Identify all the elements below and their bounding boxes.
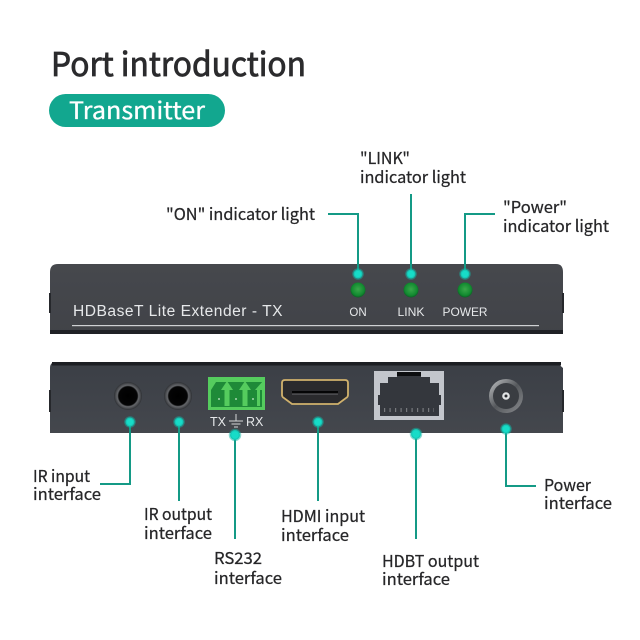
callout: HDBT output interface: HDBT output: [382, 548, 479, 572]
LED: POWER: [458, 282, 472, 298]
IR input jack: [114, 382, 142, 410]
RX label: RX: [246, 415, 264, 429]
title: Port introduction: [51, 38, 306, 86]
callout: Power indicator light: [460, 194, 609, 278]
label: POWER: POWER: [442, 307, 488, 319]
callout: LINK indicator light: "LINK": [360, 145, 410, 169]
callout: HDMI input interface: interface: [281, 522, 349, 546]
LED: LINK: [404, 282, 418, 298]
callout: IR output interface: interface: [144, 520, 212, 544]
callout: Power indicator light: indicator light: [503, 213, 609, 237]
ground symbol: [229, 414, 243, 427]
panel: transmitter front device: [49, 264, 564, 334]
callout: Power interface: Power: [544, 472, 592, 496]
callout: LINK indicator light: [360, 145, 466, 278]
callout: IR output interface: IR output: [144, 501, 212, 525]
callout: Power indicator light: "Power": [503, 194, 567, 218]
callout: ON indicator light: [166, 201, 362, 278]
callout: IR input interface: [33, 418, 134, 505]
callout: RS232 interface: [214, 430, 282, 589]
power jack: [489, 379, 523, 413]
callout: Power interface: [502, 424, 612, 514]
badge: Transmitter: Transmitter: [69, 91, 206, 126]
HDMI port: [282, 380, 348, 404]
callout: HDBT output interface: interface: [382, 566, 450, 590]
IR output jack: [164, 382, 192, 410]
callout: ON indicator light: "ON" indicator light: [166, 201, 315, 225]
RS232 green terminal: [208, 377, 265, 410]
callout: HDMI input interface: [281, 418, 365, 546]
RS232 pin labels: TX: [210, 415, 227, 429]
callout: RS232 interface: RS232: [214, 545, 262, 569]
LED: ON: [350, 282, 366, 298]
callout: Power interface: interface: [544, 490, 612, 514]
callout: IR input interface: IR input: [33, 463, 90, 487]
callout: RS232 interface: interface: [214, 565, 282, 589]
HDBT RJ45 port: [374, 371, 444, 420]
callout: HDBT output interface: [382, 429, 479, 590]
callout: LINK indicator light: indicator light: [360, 164, 466, 188]
callout: IR output interface: [144, 418, 212, 544]
label: LINK: LINK: [398, 307, 425, 319]
device name: HDBaseT Lite Extender - TX: [73, 303, 283, 320]
callout: HDMI input interface: HDMI input: [281, 503, 365, 527]
panel: transmitter rear device: [49, 362, 564, 433]
callout: IR input interface: interface: [33, 481, 101, 505]
label: ON: ON: [349, 307, 367, 319]
